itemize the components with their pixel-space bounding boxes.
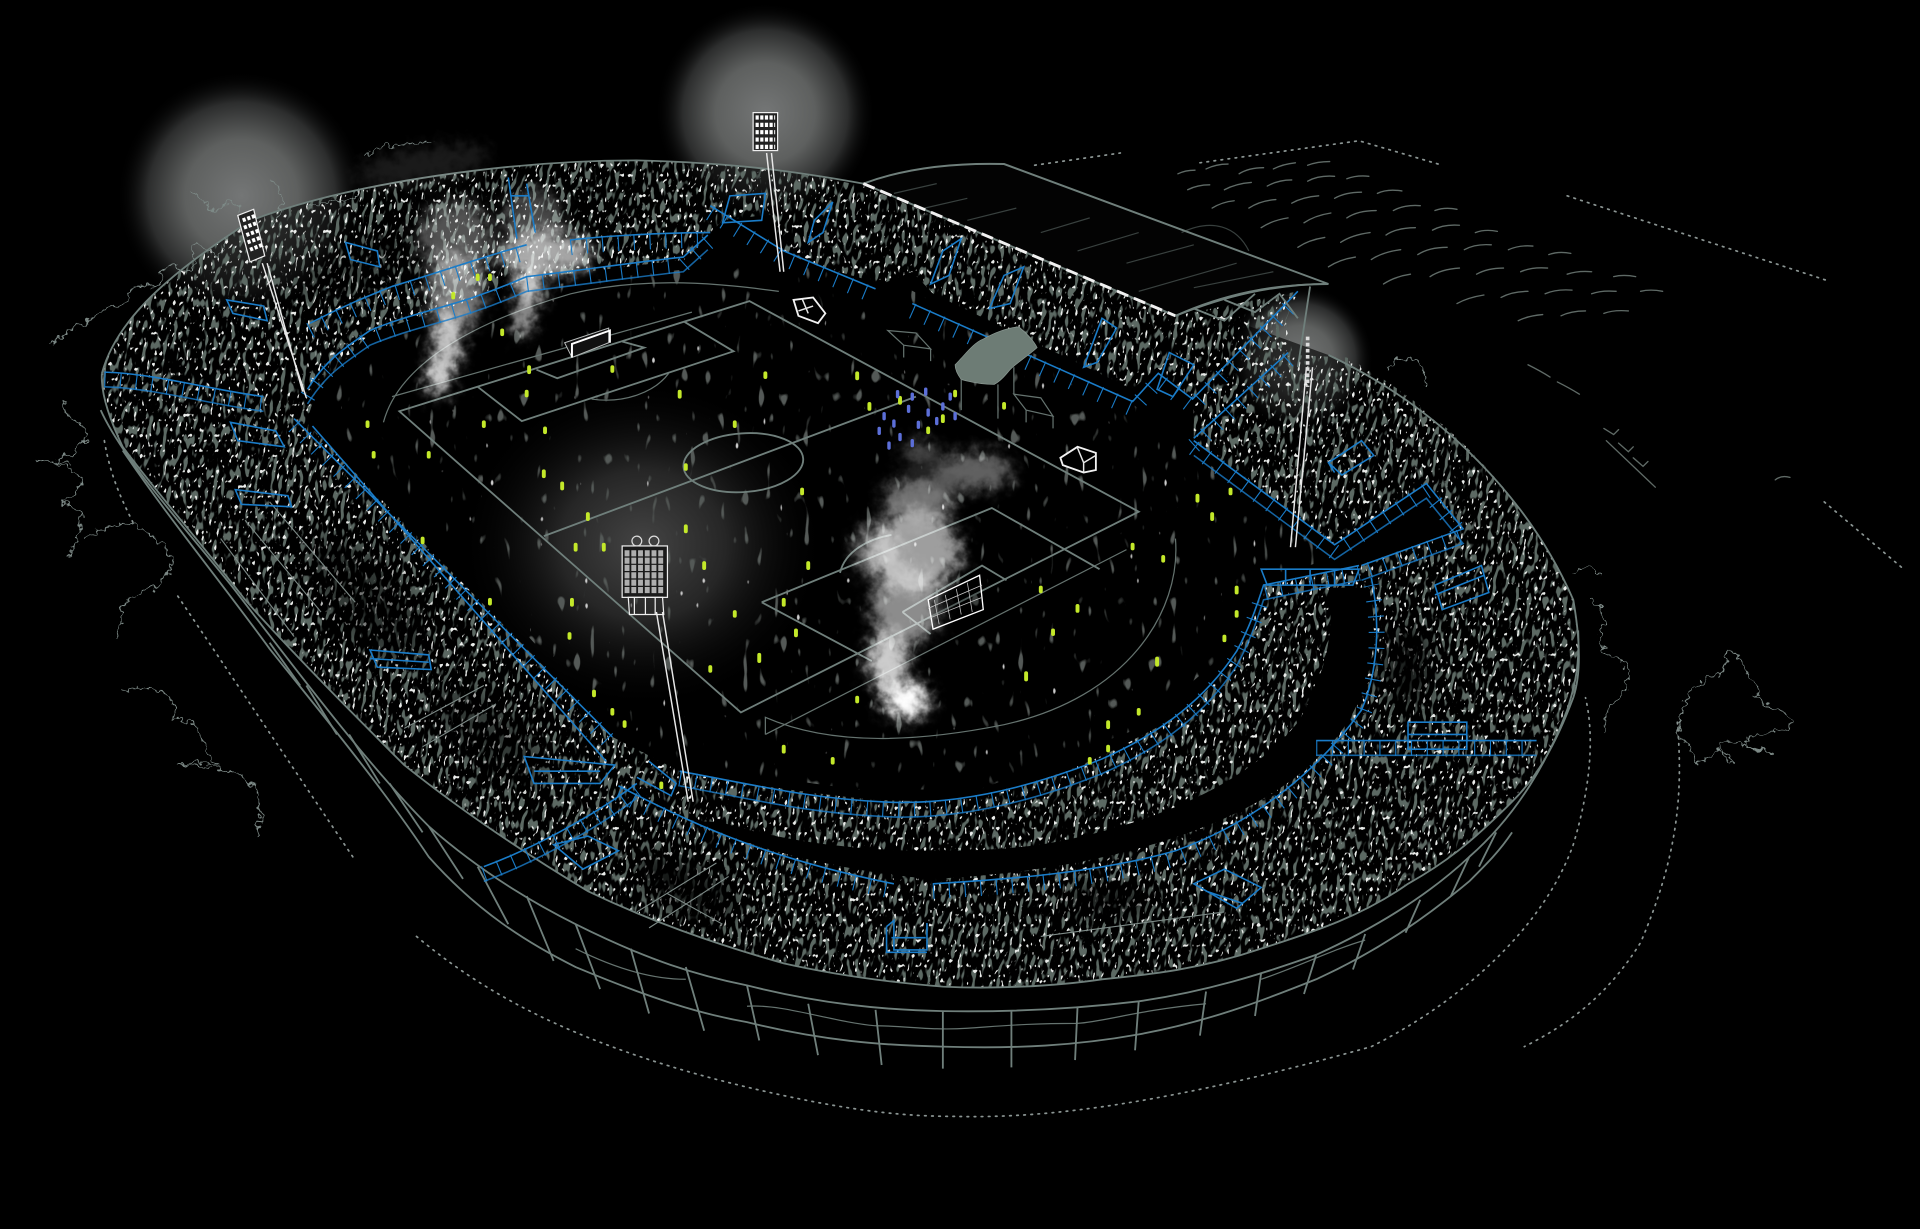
players on the pitch bbox=[336, 268, 1328, 790]
stadium outer rim bbox=[101, 160, 1579, 1047]
car on track top bbox=[794, 297, 825, 323]
team in blue bbox=[879, 389, 955, 448]
pitch-side players: yellow vests bbox=[368, 275, 1237, 787]
running track and pitch markings bbox=[383, 283, 1176, 738]
darkened stand areas bbox=[280, 215, 1433, 933]
floodlight glow: left bbox=[117, 71, 366, 321]
stand floodlight: right bbox=[1291, 337, 1313, 547]
trees right bbox=[1390, 358, 1791, 765]
parked cars upper right bbox=[1178, 162, 1790, 487]
pitch light glow bbox=[459, 379, 827, 710]
car on track right bbox=[1060, 447, 1096, 473]
floodlight glow: top bbox=[655, 2, 876, 223]
blue stairways bbox=[227, 177, 1489, 952]
crowd in the stands bbox=[102, 161, 1578, 987]
trees left bbox=[37, 140, 431, 836]
stand floodlight: left bbox=[238, 209, 306, 398]
tunnel tent bbox=[955, 327, 1037, 384]
smoke spray top left bbox=[353, 137, 492, 194]
stand floodlight: top bbox=[753, 113, 784, 272]
goal top-left bbox=[565, 328, 610, 357]
grandstand roof bbox=[863, 164, 1328, 367]
foreground floodlight bbox=[622, 536, 693, 802]
stadium shadow mass bbox=[102, 160, 1579, 1011]
goal bottom-right bbox=[928, 575, 983, 629]
dotted ground lines bbox=[104, 141, 1904, 1117]
tent supports bbox=[961, 367, 1014, 419]
benches bbox=[888, 331, 1053, 428]
smoke plume: middle bbox=[499, 191, 592, 334]
smoke plume: large on pitch bbox=[855, 441, 1013, 719]
stair lines in lower-left stand bbox=[221, 502, 1224, 936]
smoke plume: left bbox=[419, 202, 492, 394]
support columns bbox=[270, 643, 1496, 1069]
floodlight glow: right bbox=[1227, 285, 1374, 432]
blue crowd barriers bbox=[104, 206, 1537, 891]
